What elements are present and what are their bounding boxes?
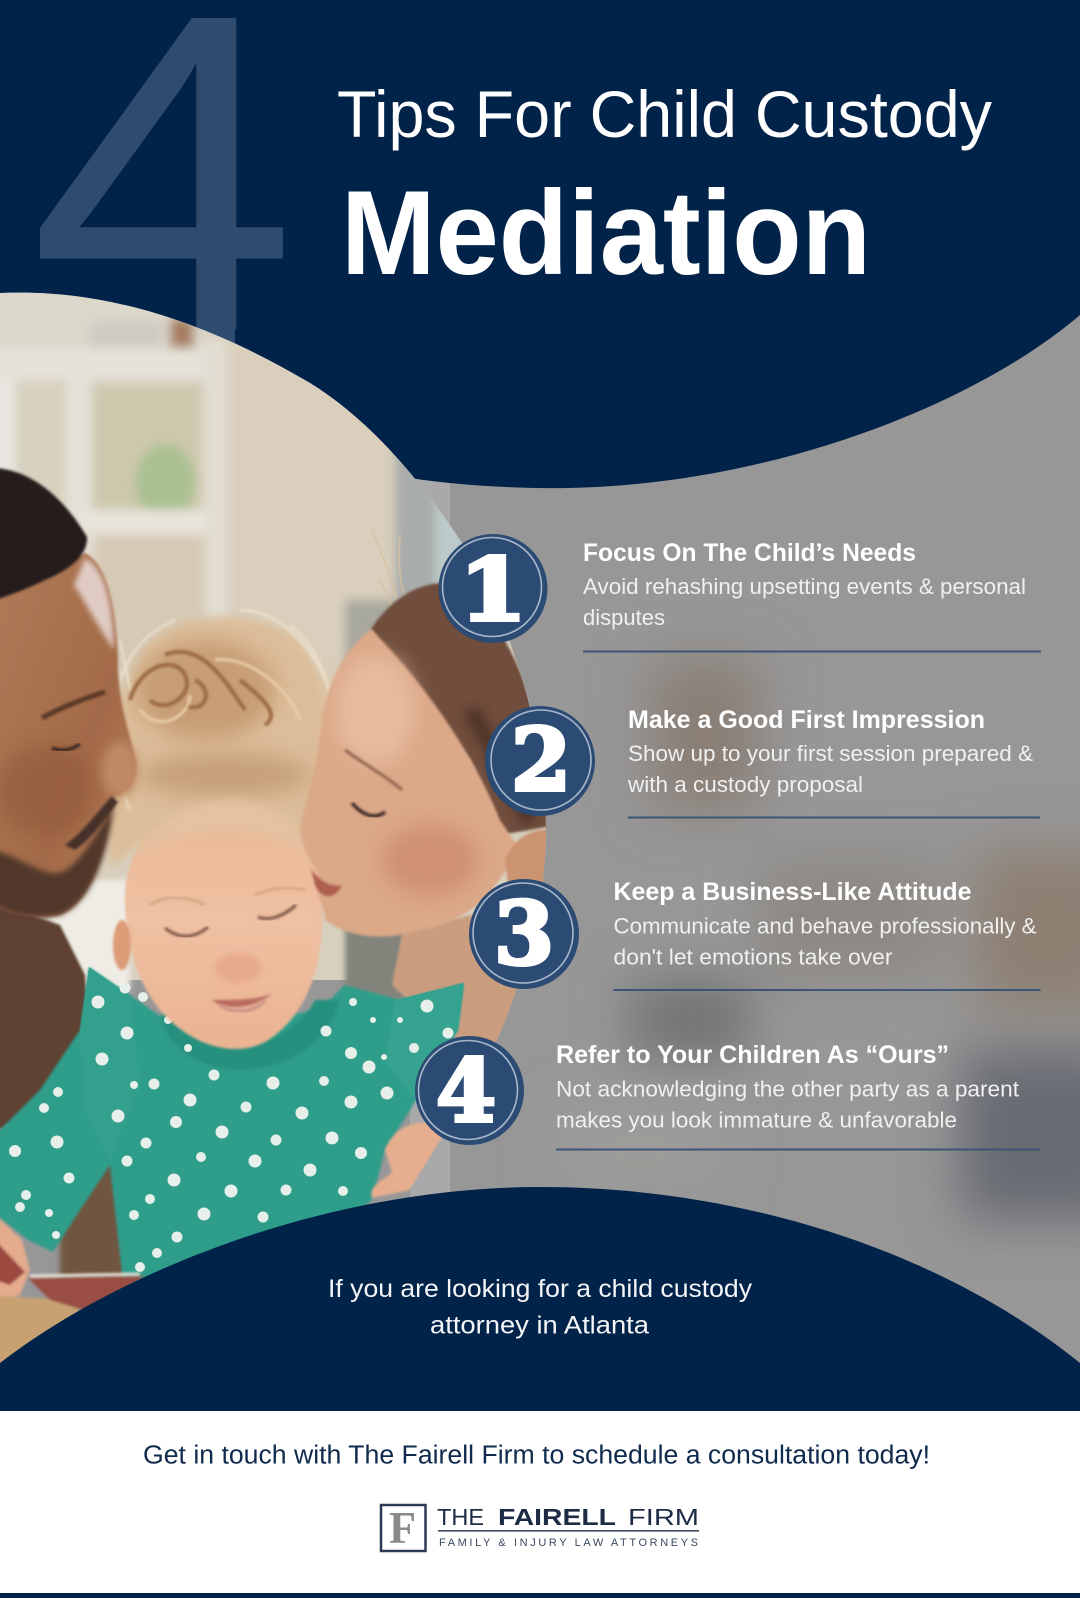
logo wordmark: FAIRELL [498, 1504, 616, 1530]
logo wordmark: THE [437, 1504, 484, 1530]
tip 2 text [627, 706, 1033, 797]
tip 1 text: Focus On The Child’s Needs [583, 539, 916, 567]
panel: white footer [0, 1411, 1080, 1600]
man's head [0, 468, 138, 917]
call-to-action text: attorney in Atlanta [430, 1312, 649, 1340]
tip 2 text: Make a Good First Impression [628, 706, 985, 734]
title: Tips For Child Custody [337, 77, 992, 151]
badge 1: 1 [459, 540, 527, 641]
panel: top navy header [0, 0, 1080, 488]
call-to-action text: If you are looking for a child custody [328, 1275, 753, 1303]
badge 3: 3 [494, 884, 554, 985]
title: Mediation [341, 166, 871, 300]
tip 3 text [614, 878, 1036, 970]
logo: The Fairell Firm [381, 1503, 699, 1553]
call-to-action text [328, 1275, 753, 1340]
child's face [111, 826, 323, 1051]
tip 2 text: with a custody proposal [627, 772, 863, 797]
child's hair [106, 610, 335, 880]
tip 4 text: makes you look immature & unfavorable [556, 1108, 957, 1132]
woman's hair and head [300, 530, 552, 937]
badge 4 [415, 1036, 524, 1145]
tip 1 text: Avoid rehashing upsetting events & personal [583, 574, 1026, 599]
title [337, 77, 992, 300]
child's shirt [0, 967, 464, 1300]
tip 2 text: Show up to your first session prepared & [628, 741, 1033, 766]
logo wordmark [437, 1504, 699, 1549]
badge 3 [469, 879, 579, 989]
badge 4: 4 [436, 1041, 496, 1142]
tip 3 text: don't let emotions take over [614, 944, 893, 970]
badge 2 [485, 706, 595, 816]
logo mark: F [389, 1503, 416, 1553]
photo background: shelves and wall [0, 280, 560, 980]
photo: parents kissing child [0, 270, 590, 1370]
tip 4 text: Refer to Your Children As “Ours” [556, 1041, 949, 1069]
panel: bottom navy call-to-action [0, 1187, 1080, 1412]
footer navy bar [0, 1593, 1080, 1598]
tip 1 text [583, 539, 1026, 630]
badge 2: 2 [511, 710, 571, 811]
tip 4 text [556, 1041, 1020, 1132]
logo wordmark: FIRM [628, 1504, 699, 1530]
badge 1 [438, 534, 548, 643]
panel: blurred gray background [0, 280, 1080, 1420]
logo wordmark: FAMILY & INJURY LAW ATTORNEYS [439, 1537, 698, 1549]
polka dots [9, 982, 454, 1272]
tip 1 [438, 534, 1041, 652]
tip 2 [485, 706, 1040, 818]
footer sentence: Get in touch with The Fairell Firm to schedule a consultation today! [143, 1442, 930, 1470]
tip 3 text: Communicate and behave professionally & [614, 914, 1036, 938]
tip 3 [469, 878, 1040, 991]
tip 1 text: disputes [583, 605, 665, 630]
background gaps around the child [50, 880, 405, 1290]
logo mark [381, 1503, 426, 1553]
child's hands and table [0, 1123, 447, 1370]
tip 4 text: Not acknowledging the other party as a parent [556, 1076, 1020, 1102]
tip 3 text: Keep a Business-Like Attitude [614, 878, 972, 906]
woman's sweater [391, 913, 517, 1043]
tip 4 [415, 1036, 1040, 1150]
man's shirt [0, 900, 88, 1135]
